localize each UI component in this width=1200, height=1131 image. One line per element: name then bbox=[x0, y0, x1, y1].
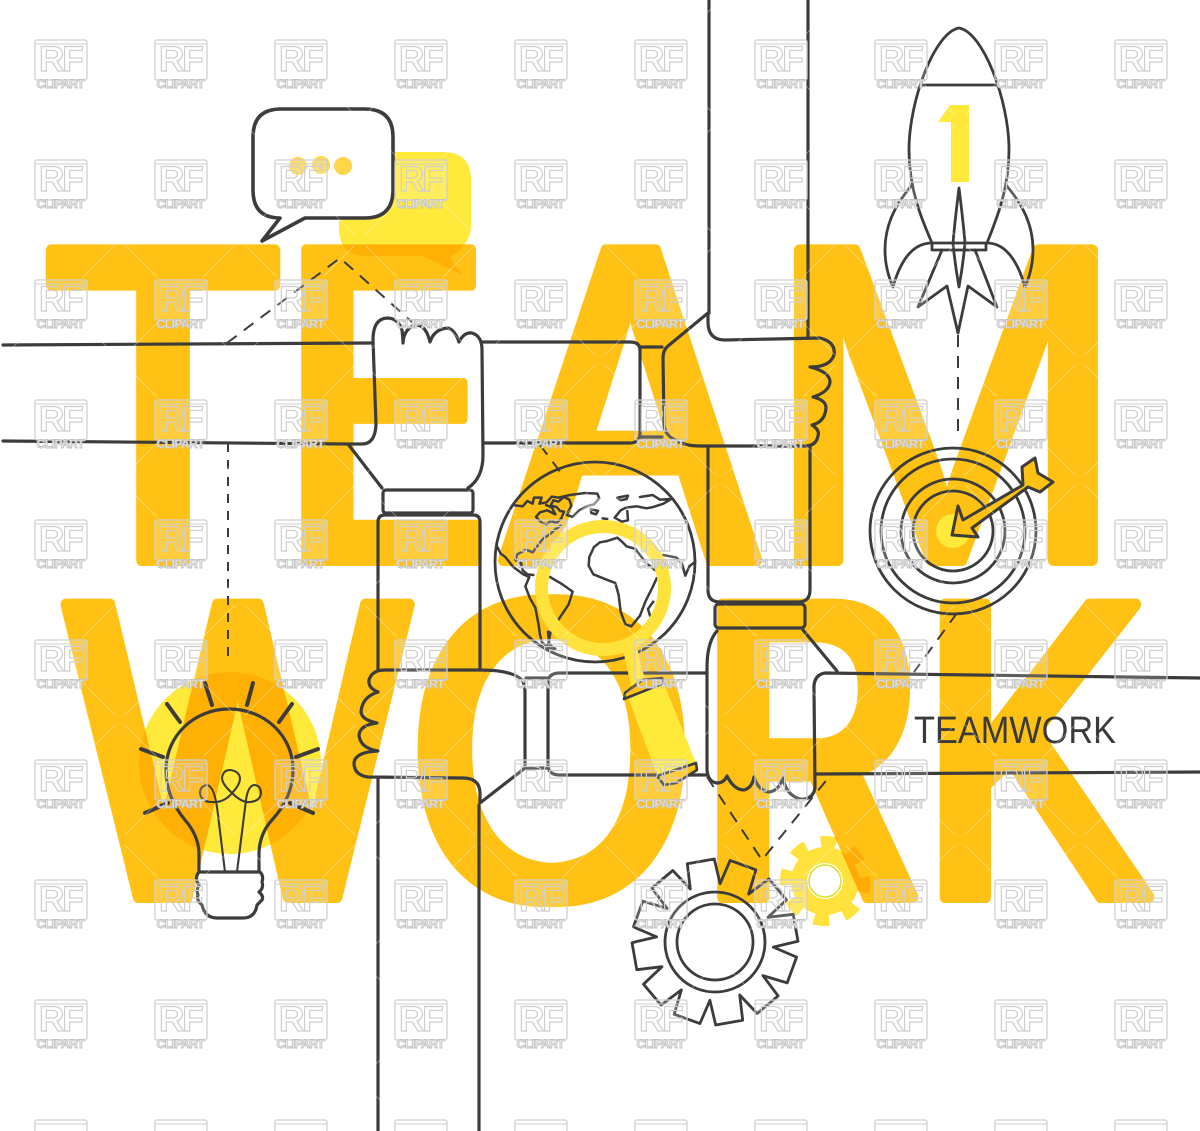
watermark grid: RF bbox=[159, 760, 203, 799]
watermark grid: RF bbox=[279, 400, 323, 439]
watermark grid: CLIPART bbox=[36, 77, 85, 91]
watermark grid: RF bbox=[519, 40, 563, 79]
letter O: O bbox=[411, 513, 692, 987]
watermark grid: RF bbox=[519, 880, 563, 919]
watermark grid: RF bbox=[39, 520, 83, 559]
watermark grid: CLIPART bbox=[756, 917, 805, 931]
watermark grid: CLIPART bbox=[1116, 437, 1165, 451]
watermark grid: CLIPART bbox=[36, 197, 85, 211]
watermark grid: RF bbox=[639, 520, 683, 559]
watermark grid: CLIPART bbox=[396, 677, 445, 691]
watermark grid: CLIPART bbox=[756, 437, 805, 451]
watermark grid: RF bbox=[879, 1000, 923, 1039]
watermark grid: CLIPART bbox=[636, 1037, 685, 1051]
watermark grid: CLIPART bbox=[36, 677, 85, 691]
watermark grid: RF bbox=[879, 40, 923, 79]
watermark grid: CLIPART bbox=[156, 677, 205, 691]
watermark grid: RF bbox=[639, 40, 683, 79]
watermark grid: CLIPART bbox=[516, 797, 565, 811]
watermark grid: RF bbox=[999, 1000, 1043, 1039]
watermark grid: CLIPART bbox=[276, 77, 325, 91]
watermark grid: RF bbox=[519, 520, 563, 559]
icon: globe bbox=[495, 462, 695, 662]
watermark grid: CLIPART bbox=[156, 317, 205, 331]
watermark grid: CLIPART bbox=[156, 557, 205, 571]
watermark grid: RF bbox=[39, 160, 83, 199]
watermark grid: RF bbox=[879, 400, 923, 439]
watermark grid: RF bbox=[39, 1000, 83, 1039]
sleeve of upward fist bbox=[378, 515, 480, 670]
watermark grid: CLIPART bbox=[516, 77, 565, 91]
watermark grid: RF bbox=[399, 160, 443, 199]
icon: outlined speech bubble bbox=[253, 109, 393, 241]
sleeve from left to right fist bbox=[483, 342, 640, 443]
watermark grid: CLIPART bbox=[156, 917, 205, 931]
watermark grid: RF bbox=[1119, 160, 1163, 199]
label: TEAMWORK: TEAMWORK bbox=[914, 710, 1116, 752]
watermark grid: RF bbox=[999, 280, 1043, 319]
watermark grid: RF bbox=[1119, 1000, 1163, 1039]
watermark grid: CLIPART bbox=[396, 197, 445, 211]
watermark grid: RF bbox=[879, 640, 923, 679]
watermark grid: CLIPART bbox=[756, 1037, 805, 1051]
icon: rocket bbox=[885, 28, 1033, 333]
watermark grid: RF bbox=[279, 160, 323, 199]
cuff of right fist bbox=[641, 347, 662, 437]
fist pointing left bbox=[354, 670, 525, 803]
watermark grid: CLIPART bbox=[876, 77, 925, 91]
watermark grid: RF bbox=[159, 280, 203, 319]
watermark grid: CLIPART bbox=[756, 797, 805, 811]
watermark grid: RF bbox=[399, 400, 443, 439]
watermark grid: CLIPART bbox=[756, 77, 805, 91]
sleeve below right fist bbox=[708, 447, 810, 602]
watermark grid: CLIPART bbox=[1116, 557, 1165, 571]
watermark grid: RF bbox=[1119, 880, 1163, 919]
watermark grid: RF bbox=[519, 1000, 563, 1039]
watermark grid: RF bbox=[159, 160, 203, 199]
watermark grid: CLIPART bbox=[516, 1037, 565, 1051]
watermark grid: RF bbox=[999, 880, 1043, 919]
watermark grid: CLIPART bbox=[156, 437, 205, 451]
watermark grid: RF bbox=[759, 1000, 803, 1039]
dashed connector lines bbox=[227, 258, 958, 860]
watermark grid: RF bbox=[399, 640, 443, 679]
watermark grid: CLIPART bbox=[996, 797, 1045, 811]
watermark grid: CLIPART bbox=[276, 557, 325, 571]
watermark grid: CLIPART bbox=[156, 1037, 205, 1051]
watermark grid: RF bbox=[639, 400, 683, 439]
watermark grid: CLIPART bbox=[396, 1037, 445, 1051]
watermark grid: CLIPART bbox=[636, 557, 685, 571]
watermark grid: CLIPART bbox=[396, 557, 445, 571]
watermark grid: CLIPART bbox=[996, 917, 1045, 931]
watermark grid: RF bbox=[519, 400, 563, 439]
watermark grid: CLIPART bbox=[156, 77, 205, 91]
watermark grid: RF bbox=[519, 760, 563, 799]
watermark grid: RF bbox=[759, 520, 803, 559]
watermark grid: CLIPART bbox=[636, 677, 685, 691]
watermark grid: CLIPART bbox=[636, 197, 685, 211]
title word: TEAM bbox=[46, 153, 1127, 656]
watermark grid: RF bbox=[759, 160, 803, 199]
letter W: W bbox=[69, 514, 409, 988]
watermark grid: CLIPART bbox=[996, 1037, 1045, 1051]
watermark grid: RF bbox=[519, 160, 563, 199]
arm from bottom bbox=[378, 778, 479, 1131]
watermark grid: CLIPART bbox=[636, 77, 685, 91]
watermark grid: CLIPART bbox=[396, 917, 445, 931]
cuff of left fist bbox=[526, 678, 547, 768]
watermark grid: RF bbox=[879, 160, 923, 199]
watermark grid: RF bbox=[279, 640, 323, 679]
letter E: E bbox=[291, 153, 481, 656]
watermark grid: CLIPART bbox=[876, 917, 925, 931]
watermark grid: CLIPART bbox=[276, 917, 325, 931]
cuff of upward fist bbox=[383, 490, 473, 513]
watermark grid: RF bbox=[999, 760, 1043, 799]
watermark grid: CLIPART bbox=[516, 557, 565, 571]
watermark grid: RF bbox=[159, 40, 203, 79]
watermark grid: RF bbox=[399, 880, 443, 919]
watermark grid: CLIPART bbox=[1116, 797, 1165, 811]
watermark grid: CLIPART bbox=[996, 437, 1045, 451]
watermark grid: RF bbox=[519, 280, 563, 319]
watermark grid: CLIPART bbox=[36, 917, 85, 931]
watermark grid: CLIPART bbox=[36, 437, 85, 451]
watermark grid: RF bbox=[519, 640, 563, 679]
watermark grid: RF bbox=[399, 1000, 443, 1039]
icon: target with arrow bbox=[870, 448, 1053, 614]
watermark grid: RF bbox=[639, 280, 683, 319]
watermark grid: CLIPART bbox=[756, 677, 805, 691]
watermark grid: RF bbox=[279, 40, 323, 79]
watermark grid: RF bbox=[759, 40, 803, 79]
icon: light bulb bbox=[141, 683, 318, 918]
watermark grid: RF bbox=[639, 760, 683, 799]
watermark grid: CLIPART bbox=[276, 797, 325, 811]
watermark grid: CLIPART bbox=[156, 797, 205, 811]
watermark grid: CLIPART bbox=[36, 317, 85, 331]
watermark grid: RF bbox=[159, 520, 203, 559]
bulb glow circle bbox=[139, 672, 321, 854]
watermark grid: RF bbox=[279, 520, 323, 559]
watermark grid: CLIPART bbox=[876, 437, 925, 451]
watermark grid: RF bbox=[999, 400, 1043, 439]
arm from right lower edge bbox=[817, 772, 1200, 774]
arm from top bbox=[709, 0, 808, 338]
watermark grid: RF bbox=[279, 280, 323, 319]
fist pointing down bbox=[707, 630, 1200, 799]
watermark grid: CLIPART bbox=[36, 557, 85, 571]
watermark grid: RF bbox=[1119, 280, 1163, 319]
watermark grid: CLIPART bbox=[996, 317, 1045, 331]
watermark grid: RF bbox=[279, 1000, 323, 1039]
watermark grid: CLIPART bbox=[636, 317, 685, 331]
fist pointing up bbox=[348, 318, 483, 488]
watermark grid: RF bbox=[159, 1000, 203, 1039]
watermark grid: CLIPART bbox=[276, 317, 325, 331]
watermark grid: CLIPART bbox=[1116, 317, 1165, 331]
watermark grid: CLIPART bbox=[876, 557, 925, 571]
watermark grid: RF bbox=[759, 760, 803, 799]
watermark grid: CLIPART bbox=[276, 437, 325, 451]
cuff of downward fist bbox=[715, 604, 805, 628]
watermark grid: RF bbox=[39, 400, 83, 439]
watermark grid: CLIPART bbox=[516, 197, 565, 211]
watermark grid: CLIPART bbox=[516, 437, 565, 451]
watermark grid: CLIPART bbox=[636, 797, 685, 811]
watermark grid: RF bbox=[39, 760, 83, 799]
watermark grid: CLIPART bbox=[1116, 77, 1165, 91]
watermark grid: RF bbox=[399, 520, 443, 559]
watermark grid: RF bbox=[279, 880, 323, 919]
watermark grid: CLIPART bbox=[1116, 197, 1165, 211]
watermark grid: RF bbox=[759, 280, 803, 319]
watermark grid: CLIPART bbox=[36, 1037, 85, 1051]
icon: large outlined gear bbox=[632, 859, 798, 1025]
watermark grid: CLIPART bbox=[1116, 917, 1165, 931]
watermark grid: RF bbox=[39, 880, 83, 919]
watermark grid: CLIPART bbox=[276, 1037, 325, 1051]
watermark grid: RF bbox=[1119, 40, 1163, 79]
watermark grid: CLIPART bbox=[396, 77, 445, 91]
icon: magnifying glass bbox=[542, 497, 697, 785]
watermark grid: RF bbox=[399, 40, 443, 79]
watermark grid: RF bbox=[759, 880, 803, 919]
watermark grid: CLIPART bbox=[756, 197, 805, 211]
watermark grid: RF bbox=[159, 880, 203, 919]
watermark grid: CLIPART bbox=[36, 797, 85, 811]
watermark grid: RF bbox=[879, 520, 923, 559]
watermark grid: CLIPART bbox=[396, 797, 445, 811]
watermark grid: CLIPART bbox=[1116, 677, 1165, 691]
watermark grid: RF bbox=[879, 880, 923, 919]
watermark grid: RF bbox=[639, 640, 683, 679]
watermark grid: RF bbox=[639, 880, 683, 919]
watermark grid: CLIPART bbox=[876, 677, 925, 691]
watermark grid: RF bbox=[279, 760, 323, 799]
watermark grid: CLIPART bbox=[996, 197, 1045, 211]
watermark grid: CLIPART bbox=[876, 317, 925, 331]
watermark grid: CLIPART bbox=[516, 317, 565, 331]
watermark grid: RF bbox=[39, 640, 83, 679]
watermark grid: RF bbox=[1119, 640, 1163, 679]
watermark grid: RF bbox=[639, 1000, 683, 1039]
watermark grid: RF bbox=[39, 280, 83, 319]
title word: WORK bbox=[69, 512, 1148, 988]
watermark grid: CLIPART bbox=[636, 917, 685, 931]
watermark grid: CLIPART bbox=[996, 557, 1045, 571]
watermark grid: CLIPART bbox=[996, 677, 1045, 691]
watermark grid: CLIPART bbox=[396, 317, 445, 331]
watermark grid: CLIPART bbox=[156, 197, 205, 211]
watermark grid: CLIPART bbox=[756, 557, 805, 571]
watermark grid: RF bbox=[879, 280, 923, 319]
watermark grid: CLIPART bbox=[756, 317, 805, 331]
watermark grid: RF bbox=[1119, 760, 1163, 799]
sleeve of left fist bbox=[548, 673, 707, 775]
fist pointing right bbox=[663, 313, 834, 446]
letter R: R bbox=[705, 512, 920, 987]
watermark grid: CLIPART bbox=[1116, 1037, 1165, 1051]
watermark grid: CLIPART bbox=[276, 197, 325, 211]
watermark grid: RF bbox=[399, 760, 443, 799]
yellow speech bubble bbox=[339, 152, 471, 275]
watermark grid: RF bbox=[999, 640, 1043, 679]
watermark grid: RF bbox=[759, 640, 803, 679]
watermark grid: CLIPART bbox=[516, 677, 565, 691]
watermark grid: RF bbox=[879, 760, 923, 799]
watermark grid: RF bbox=[39, 40, 83, 79]
watermark grid: RF bbox=[399, 280, 443, 319]
watermark grid: RF bbox=[1119, 400, 1163, 439]
watermark grid: RF bbox=[999, 520, 1043, 559]
watermark grid: CLIPART bbox=[276, 677, 325, 691]
watermark grid: CLIPART bbox=[516, 917, 565, 931]
arm from left bbox=[3, 343, 372, 444]
watermark grid: RF bbox=[159, 400, 203, 439]
watermark grid: RF bbox=[999, 40, 1043, 79]
watermark grid: RF bbox=[159, 640, 203, 679]
watermark grid: RF bbox=[999, 160, 1043, 199]
watermark grid: CLIPART bbox=[876, 1037, 925, 1051]
letter A: A bbox=[508, 153, 754, 655]
letter M: M bbox=[765, 153, 1127, 656]
watermark grid: CLIPART bbox=[636, 437, 685, 451]
watermark grid: CLIPART bbox=[876, 197, 925, 211]
watermark grid: CLIPART bbox=[876, 797, 925, 811]
letter T: T bbox=[46, 154, 280, 656]
watermark grid: CLIPART bbox=[996, 77, 1045, 91]
watermark grid: RF bbox=[1119, 520, 1163, 559]
letter K: K bbox=[922, 513, 1148, 988]
watermark grid: RF bbox=[759, 400, 803, 439]
icon: small yellow gear bbox=[784, 840, 866, 922]
watermark grid: CLIPART bbox=[396, 437, 445, 451]
watermark grid: RF bbox=[639, 160, 683, 199]
